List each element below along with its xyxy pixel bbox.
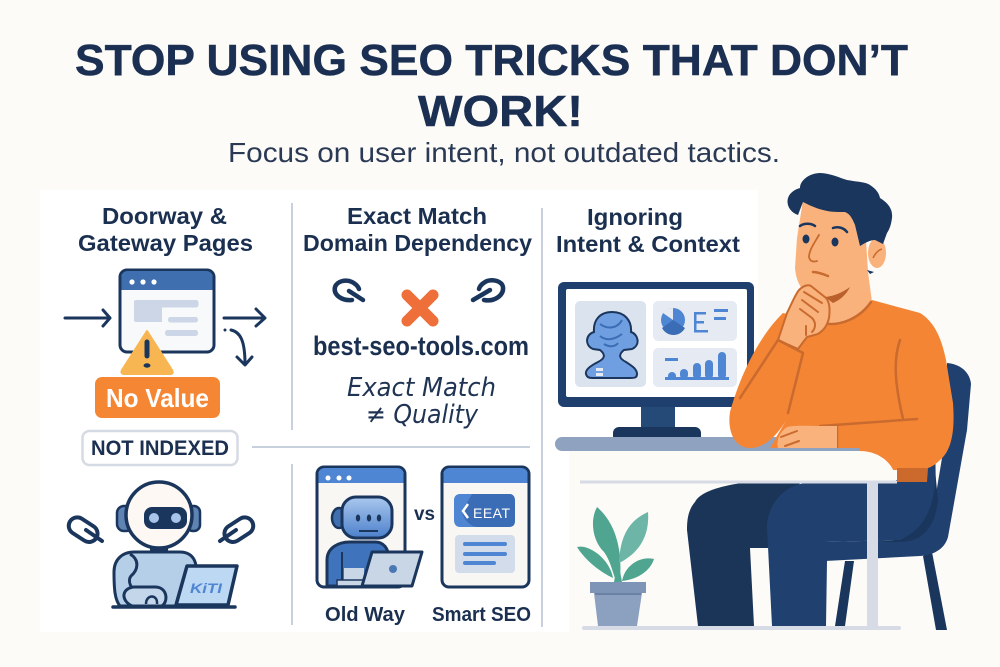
- arrow: outgoing: [224, 309, 265, 326]
- panel: exact match domain dependency: [303, 203, 532, 430]
- legend marks: [694, 309, 728, 332]
- arrow: redirect: [224, 328, 252, 365]
- person: [687, 173, 954, 626]
- badge: no value: No Value: [106, 383, 209, 413]
- neck and face: [795, 200, 872, 323]
- icon: broken link left: [335, 281, 363, 300]
- hand on chin: [778, 285, 830, 353]
- badge: not indexed: [82, 431, 238, 465]
- note: exact match is not quality: [347, 373, 496, 430]
- plant: [577, 507, 654, 626]
- title: WORK!: [418, 87, 583, 136]
- heading: ignoring intent: [556, 204, 740, 257]
- domain name: best-seo-tools.com: [313, 331, 529, 361]
- subtitle: Focus on user intent, not outdated tactics.: [228, 137, 780, 168]
- panel: doorway and gateway pages: [65, 203, 265, 607]
- heading: doorway: Doorway &: [102, 203, 227, 229]
- icon: monitor: [558, 282, 754, 438]
- icon: warning triangle: [121, 331, 173, 374]
- heading: exact match: Domain Dependency: [303, 230, 532, 256]
- desk: [555, 437, 900, 484]
- avatar: [586, 312, 638, 378]
- icon: browser window: [120, 270, 214, 352]
- desk front: [569, 450, 901, 630]
- panel: ignoring intent and context: [556, 204, 754, 438]
- heading: doorway: [78, 203, 253, 256]
- icon: robot at laptop: KiTI: [190, 580, 223, 596]
- note: exact match is not quality: ≠ Quality: [366, 400, 479, 430]
- torso and arm: [729, 300, 954, 482]
- arrow: incoming: [65, 310, 110, 326]
- heading: exact match: [303, 203, 532, 256]
- icon: robot at laptop: [113, 482, 237, 607]
- old way window: [317, 467, 422, 587]
- badge: not indexed: NOT INDEXED: [91, 437, 229, 460]
- icon: orange cross: [407, 295, 433, 321]
- label: old way: Old Way: [325, 604, 406, 626]
- icon: broken link right: [473, 280, 503, 300]
- eeat badge: EEAT: [473, 505, 510, 521]
- smart seo window: [442, 467, 529, 587]
- head: [787, 173, 892, 303]
- forearm hand: [777, 426, 837, 448]
- chair: [825, 363, 971, 630]
- heading: ignoring intent: Intent & Context: [556, 231, 740, 257]
- heading: ignoring intent: Ignoring: [587, 204, 683, 230]
- title: [75, 36, 908, 136]
- label: smart seo: Smart SEO: [432, 604, 531, 626]
- icon: right chain link: [220, 514, 256, 545]
- heading: doorway: Gateway Pages: [78, 230, 253, 256]
- legs: [687, 483, 927, 626]
- bar chart: [665, 352, 729, 380]
- heading: exact match: Exact Match: [347, 203, 487, 229]
- face details: [800, 224, 850, 303]
- badge: no value: [95, 377, 220, 418]
- pie chart: [661, 308, 685, 335]
- panel: old way vs smart seo: [317, 467, 531, 626]
- title: STOP USING SEO TRICKS THAT DON’T: [75, 36, 908, 85]
- note: exact match is not quality: Exact Match: [347, 373, 496, 403]
- vs label: vs: [414, 504, 435, 525]
- icon: left chain link: [66, 514, 102, 545]
